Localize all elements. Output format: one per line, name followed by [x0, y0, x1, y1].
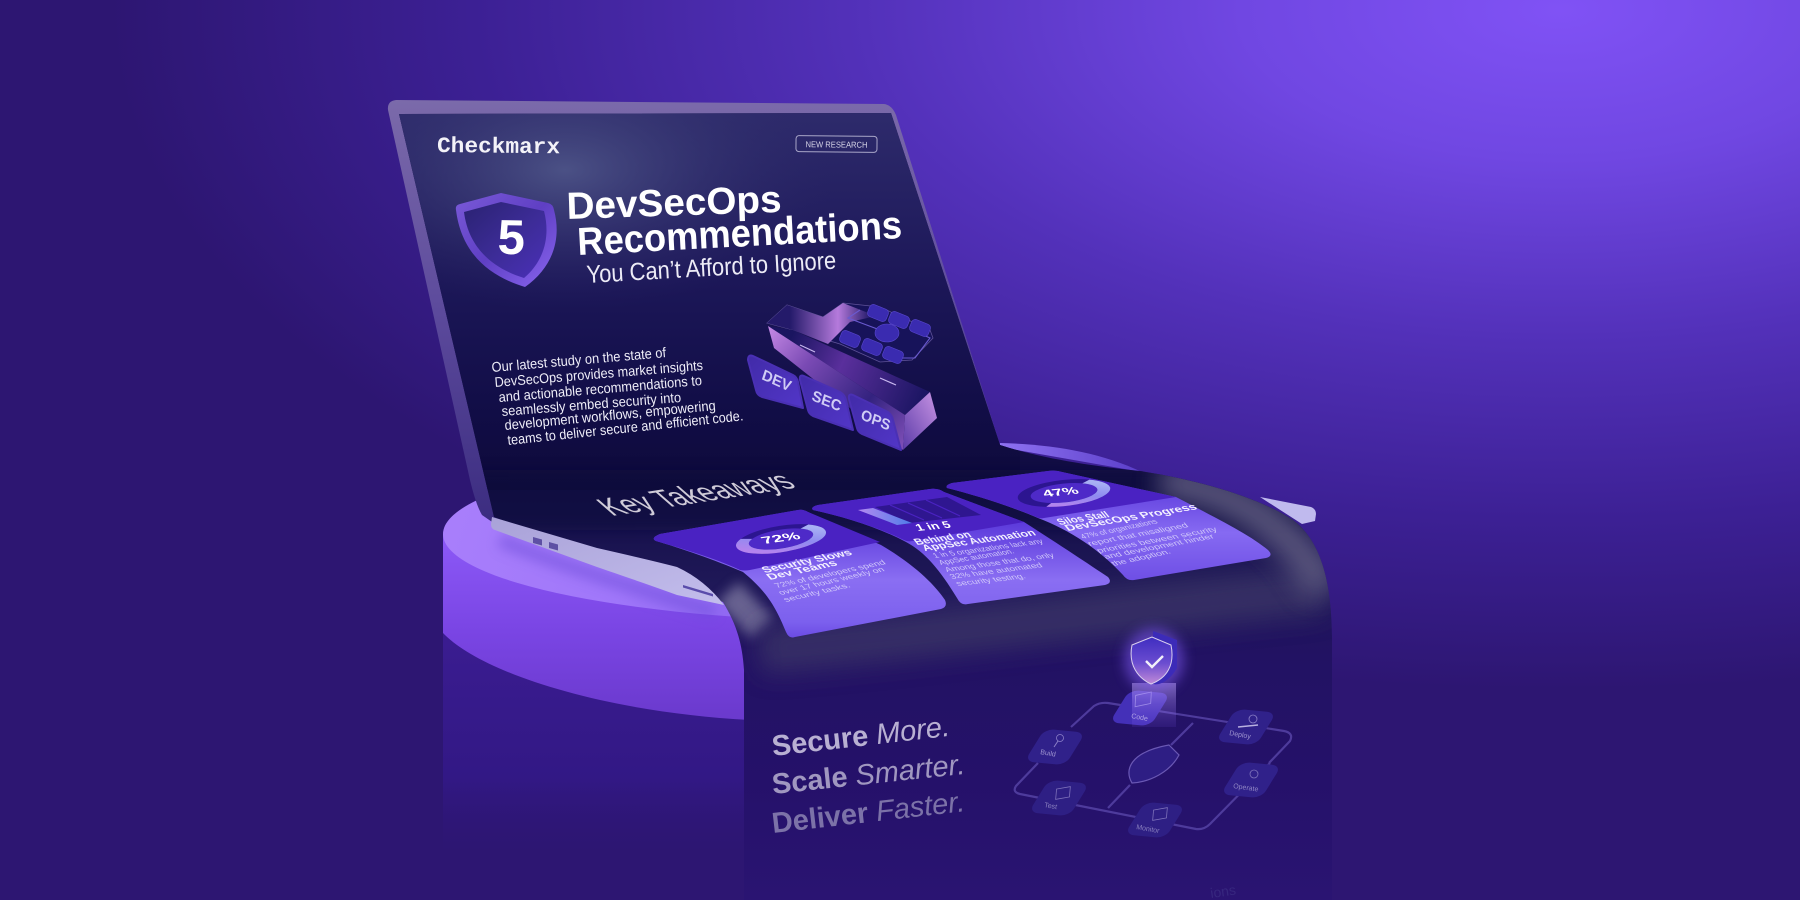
heading: Key Takeaways: Key Takeaways	[588, 467, 804, 521]
card: Behind on AppSec Automation	[812, 489, 1110, 604]
title: You Can’t Afford to Ignore	[586, 247, 837, 289]
title: Recommendations	[576, 204, 903, 264]
laptop lid frame	[388, 100, 1000, 524]
intro paragraph: and actionable recommendations to	[498, 372, 703, 405]
laptop base front	[491, 517, 724, 605]
badge: new research: NEW RESEARCH	[805, 139, 868, 150]
card text: 1 in 5 organizations lack any	[931, 537, 1045, 559]
DEV SEC OPS tiles: OPS	[859, 406, 892, 434]
tile: Monitor	[1125, 802, 1185, 838]
card text: Behind on	[911, 529, 974, 547]
tile: Monitor: Monitor	[1136, 824, 1161, 835]
intro paragraph	[491, 344, 744, 448]
mini pipeline nodes	[838, 303, 932, 365]
intro paragraph: seamlessly embed security into	[501, 389, 682, 419]
card text: over 17 hours weekly on	[776, 566, 886, 596]
card text: and development hinder	[1101, 533, 1216, 560]
tagline: Secure More.	[770, 711, 952, 763]
donut: 72%	[724, 515, 838, 563]
laptop base right edge	[1260, 497, 1316, 524]
donut: 47%	[1007, 472, 1121, 514]
tile: Test	[1029, 780, 1089, 816]
tile: Build: Build	[1040, 749, 1056, 759]
icon: glowing check shield	[1124, 628, 1184, 692]
icon: shield with number 5	[456, 193, 557, 287]
card text	[1054, 501, 1220, 567]
DEV SEC OPS tiles: SEC	[810, 387, 843, 416]
card: Silos Stall DevSecOps Progress	[947, 471, 1271, 580]
card text	[911, 527, 1056, 587]
card text: security testing.	[954, 572, 1028, 587]
bar chart: 1 in 5	[858, 497, 981, 533]
card text: Silos Stall	[1054, 509, 1112, 527]
laptop screen and rolling sheet	[399, 113, 1332, 829]
card text: AppSec automation.	[936, 547, 1016, 566]
card text: 32% have automated	[948, 561, 1044, 580]
title: DevSecOps	[566, 179, 782, 228]
card text: security tasks.	[781, 582, 853, 603]
card text: report that misaligned	[1085, 521, 1190, 547]
intro paragraph: development workflows, empowering	[504, 397, 716, 433]
tile: Operate: Operate	[1233, 783, 1259, 794]
diagram: DevOps security loop	[1015, 683, 1291, 838]
card: Security Slows Dev Teams	[654, 510, 946, 637]
card text: AppSec Automation	[919, 527, 1039, 553]
card text: 47% of organizations	[1078, 518, 1160, 540]
intro paragraph: DevSecOps provides market insights	[494, 357, 704, 390]
logo: Checkmarx: Checkmarx	[437, 134, 560, 160]
card text: Dev Teams	[763, 558, 841, 582]
bar chart: 1 in 5: 1 in 5	[913, 519, 954, 533]
tile: Build	[1025, 729, 1085, 765]
card text: 72% of developers spend	[772, 559, 888, 589]
card text	[758, 547, 888, 603]
light beam	[1132, 683, 1176, 727]
tile: Operate	[1221, 762, 1281, 798]
tagline: Deliver Faster.	[770, 786, 967, 840]
donut: 72%: 72%	[758, 530, 804, 546]
card text: DevSecOps Progress	[1062, 501, 1200, 533]
loop connectors	[1015, 703, 1291, 829]
podium cylinder	[443, 443, 1325, 900]
tagline: Scale Smarter.	[770, 749, 967, 801]
card text: Among those that do, only	[943, 551, 1056, 573]
card text: priorities between security	[1094, 525, 1220, 554]
tile: Code	[1110, 690, 1170, 726]
title	[566, 179, 903, 289]
card text: Security Slows	[758, 547, 855, 575]
intro paragraph: Our latest study on the state of	[491, 344, 667, 375]
DEV SEC OPS tiles: DEV	[760, 367, 793, 395]
tile: Code: Code	[1131, 713, 1148, 723]
DEV SEC OPS tiles	[748, 356, 901, 450]
tile: Deploy	[1216, 709, 1276, 745]
donut: 47%: 47%	[1040, 485, 1081, 499]
card text: the adoption.	[1109, 548, 1173, 567]
centre shield	[1129, 745, 1179, 783]
tile: Test: Test	[1044, 802, 1058, 811]
icon: shield with number 5: 5	[497, 211, 525, 265]
badge: new research	[796, 136, 877, 152]
illustration: DevSecOps pipeline band	[767, 303, 937, 450]
tile: Deploy: Deploy	[1229, 730, 1252, 741]
intro paragraph: teams to deliver secure and efficient code.	[507, 407, 744, 448]
tagline	[770, 711, 967, 840]
